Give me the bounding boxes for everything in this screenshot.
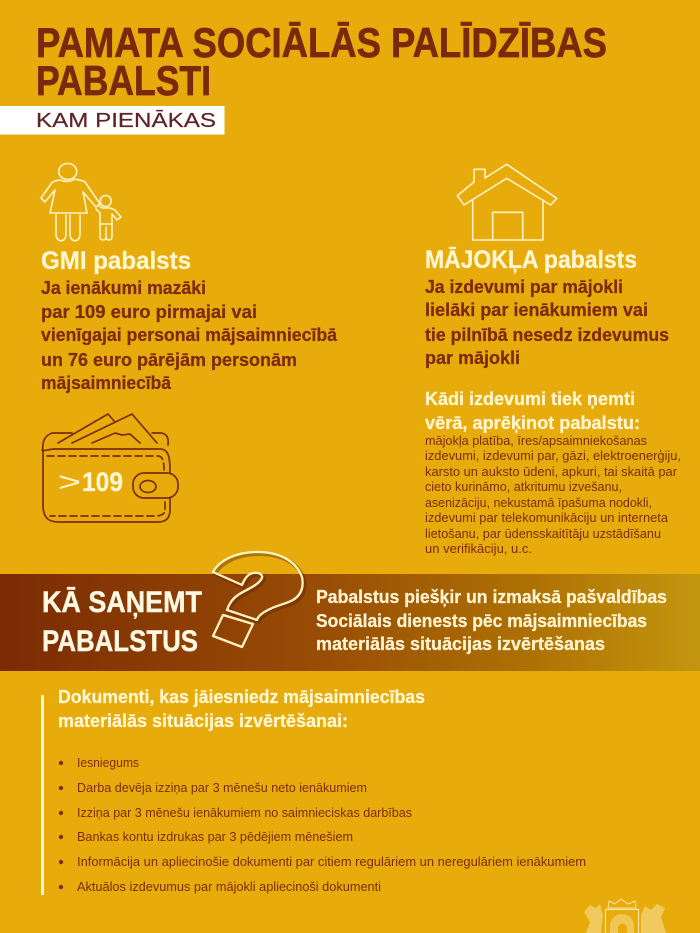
heading: GMI pabalsts: GMI pabalsts [41,247,191,275]
heading: documents [58,687,425,731]
icon: question mark [213,552,305,647]
heading: kā saņemt pabalstus [42,586,202,658]
text: housing condition: tie pilnībā nesedz izdevumus [425,325,669,345]
title: PABALSTI [36,57,211,104]
text: housing condition: par mājokli [425,348,520,368]
heading: mājokļa pabalsts: MĀJOKĻA pabalsts [425,246,637,274]
wallet amount: 109 [82,467,123,497]
subtitle banner: kam pienākas [0,106,224,134]
list: documents: Informācija un apliecinošie dokumenti par citiem regulāriem un neregulāriem ienākumiem [77,855,586,869]
text: who grants the benefit: Pabalstus piešķir un izmaksā pašvaldības [316,587,667,607]
wallet amount [58,467,123,497]
heading: kā saņemt pabalstus: KĀ SAŅEMT [42,586,202,619]
panel: kā saņemt pabalstus band [0,552,700,671]
text: GMI condition: un 76 euro pārējām personām [41,350,297,370]
title: PAMATA SOCIĀLĀS PALĪDZĪBAS [36,19,607,66]
text: expenses list: mājokļa platība, īres/apsaimniekošanas [425,434,647,448]
text: housing condition: lielāki par ienākumiem vai [425,300,648,320]
text: GMI condition: vienīgajai personai mājsaimniecībā [41,325,338,345]
wallet amount: > [58,467,81,497]
list: documents: Iesniegums [77,756,139,770]
panel: mājokļa pabalsts [425,164,681,556]
text: expenses list: lietošanu, par ūdensskaitītāju uzstādīšanu [425,527,661,541]
text: expenses list: izdevumi, izdevumi par, gāzi, elektroenerģiju, [425,449,681,463]
subtitle banner: kam pienākas: KAM PIENĀKAS [36,109,216,132]
text: expenses list [425,434,681,556]
heading: kā saņemt pabalstus: PABALSTUS [42,625,198,658]
heading: documents: Dokumenti, kas jāiesniedz mājsaimniecības [58,687,425,707]
text: housing condition: Ja izdevumi par mājokli [425,277,623,297]
text: expenses list: asenizāciju, nekustamā īpašuma nodokli, [425,496,652,510]
text: expenses list: un verifikāciju, u.c. [425,542,532,556]
list: documents: Izziņa par 3 mēnešu ienākumiem no saimnieciskas darbības [77,806,412,820]
text: GMI condition: par 109 euro pirmajai vai [41,302,257,322]
panel: GMI pabalsts [41,164,338,522]
subheading: expenses considered: vērā, aprēķinot pabalstu: [425,413,640,433]
text: GMI condition: mājsaimniecībā [41,373,172,393]
list: documents: Darba devēja izziņa par 3 mēnešu neto ienākumiem [77,781,367,795]
text: GMI condition: Ja ienākumi mazāki [41,278,206,298]
text: who grants the benefit: materiālās situācijas izvērtēšanas [316,634,605,654]
text: housing condition [425,277,669,368]
icon: house [457,164,557,240]
heading: documents: materiālās situācijas izvērtēšanai: [58,711,348,731]
icon: coat of arms of Latvia [584,899,666,933]
icon: mother and child [41,164,121,241]
list: documents [59,756,586,894]
text: who grants the benefit: Sociālais dienests pēc mājsaimniecības [316,611,647,631]
text: GMI condition [41,278,338,393]
list: documents: Aktuālos izdevumus par mājokli apliecinoši dokumenti [77,880,381,894]
list: documents: Bankas kontu izdrukas par 3 pēdējiem mēnešiem [77,830,353,844]
text: expenses list: izdevumi par telekomunikāciju un interneta [425,511,668,525]
text: expenses list: cieto kurināmo, atkritumu izvešanu, [425,480,622,494]
text: expenses list: karsto un auksto ūdeni, apkuri, tai skaitā par [425,465,677,479]
panel: required documents [41,687,586,895]
subheading: expenses considered: Kādi izdevumi tiek ņemti [425,389,635,409]
text: who grants the benefit [316,587,667,654]
subheading: expenses considered [425,389,640,433]
icon: wallet [42,414,178,522]
title [36,19,607,104]
